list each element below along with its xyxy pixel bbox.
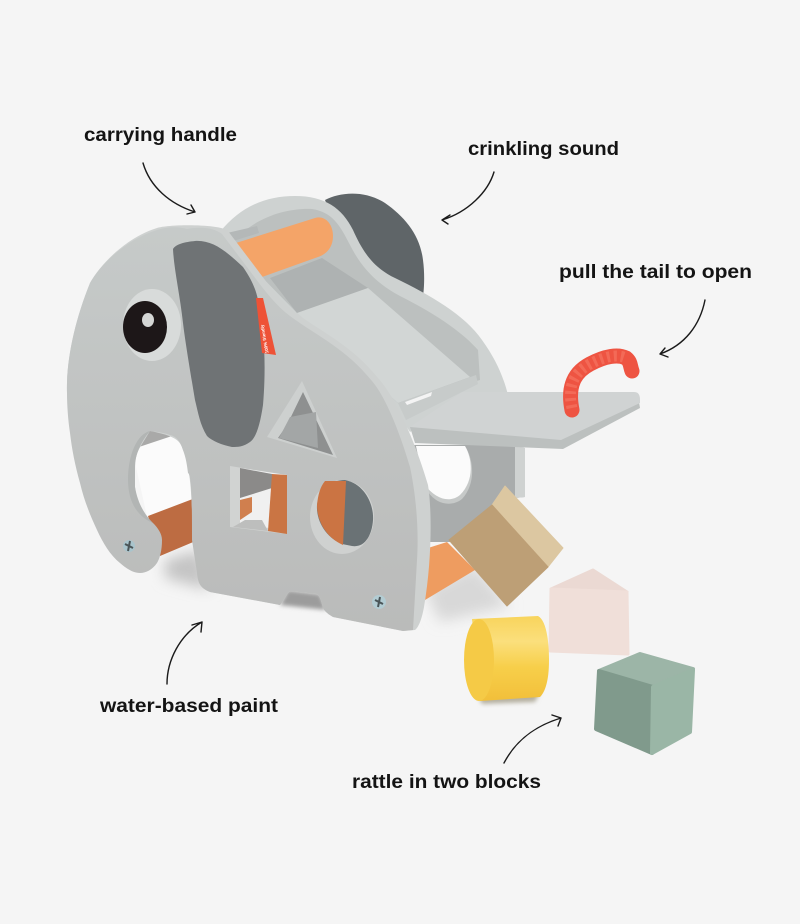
label: crinkling sound: crinkling sound bbox=[468, 139, 619, 160]
yellow cylinder block bbox=[464, 616, 549, 701]
tail panel bbox=[410, 392, 640, 449]
lower orange rod bbox=[425, 542, 475, 600]
back gray strip in trunk hole bbox=[139, 430, 172, 447]
label: rattle in two blocks: rattle in two blocks bbox=[352, 772, 541, 793]
ear tag: 100% friendly bbox=[259, 324, 269, 354]
carrying handle bbox=[236, 217, 333, 277]
eye bbox=[123, 289, 181, 361]
front ear bbox=[173, 241, 265, 447]
label: water-based paint: water-based paint bbox=[99, 696, 279, 717]
white trunk gap bbox=[130, 428, 200, 530]
back ear bbox=[325, 194, 424, 296]
arrow: carrying handle bbox=[143, 163, 195, 214]
hinge plate bbox=[398, 375, 478, 420]
back leg panel bbox=[412, 445, 525, 542]
elephant toy bbox=[67, 194, 640, 631]
arrow: pull the tail bbox=[660, 300, 705, 357]
screw: trunk bbox=[123, 540, 135, 552]
front rod bbox=[148, 497, 198, 556]
space under handle bbox=[270, 258, 368, 313]
pink triangle block bbox=[550, 570, 628, 654]
screw: foot bbox=[372, 595, 386, 609]
green cube bbox=[596, 654, 693, 753]
label: carrying handle: carrying handle bbox=[84, 125, 237, 146]
tail rope bbox=[571, 356, 632, 410]
back panel round hole bbox=[416, 446, 472, 504]
arrow: water-based paint bbox=[167, 622, 202, 684]
arrow: rattle bbox=[504, 715, 561, 763]
slide lid bbox=[297, 288, 470, 403]
circle hole bbox=[310, 480, 374, 554]
trunk hole bevel bbox=[128, 431, 153, 523]
front panel side edge bbox=[67, 225, 431, 631]
wooden cube bbox=[449, 486, 563, 606]
metal rod bbox=[227, 226, 259, 241]
ear tag bbox=[256, 298, 276, 355]
front panel face bbox=[67, 227, 418, 631]
label: pull the tail to open: pull the tail to open bbox=[559, 262, 752, 283]
ground shadows bbox=[165, 550, 540, 704]
arrow: crinkling sound bbox=[442, 172, 494, 224]
square hole bbox=[230, 466, 287, 534]
back panel bbox=[220, 196, 508, 432]
back panel inner face bbox=[235, 209, 480, 405]
triangle hole bbox=[267, 381, 337, 458]
